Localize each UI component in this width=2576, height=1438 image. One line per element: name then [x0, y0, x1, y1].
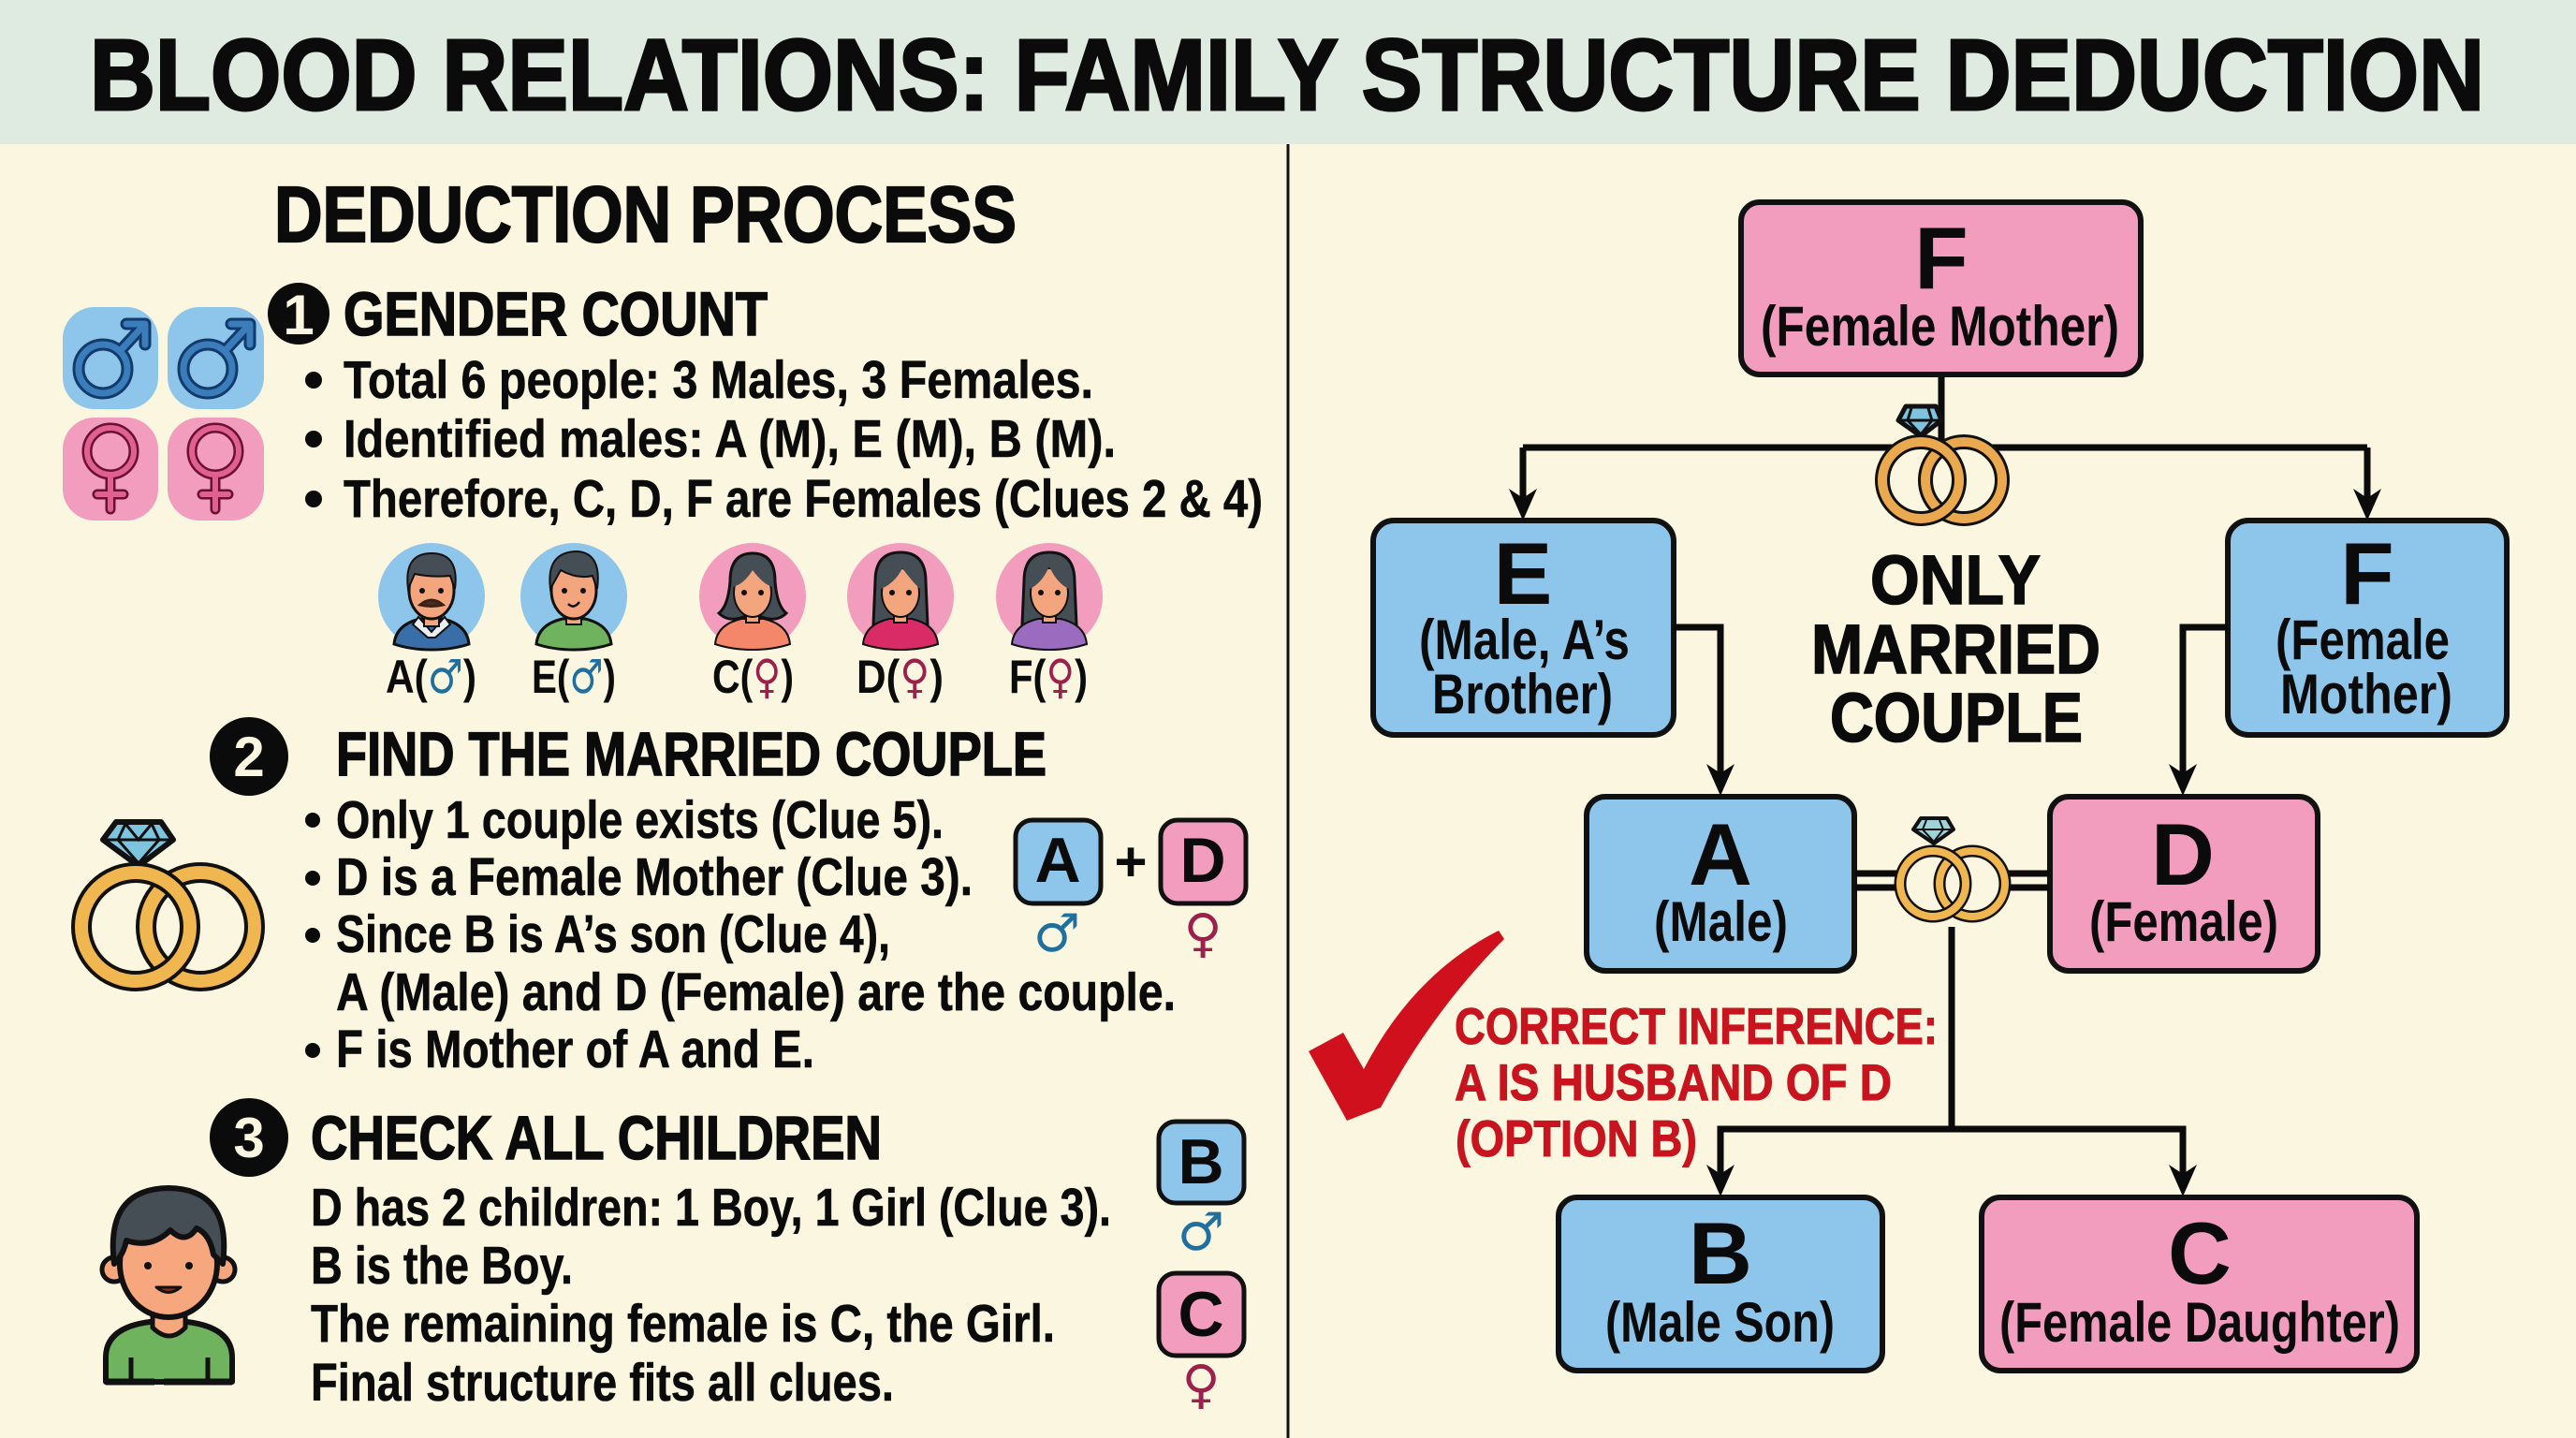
step 3 text: B is the Boy. — [311, 1236, 573, 1296]
node: E male brother: E — [1494, 524, 1552, 623]
node: E male brother: Brother) — [1432, 663, 1613, 726]
step 1: gender count — [63, 279, 1263, 704]
step 3 text: Final structure fits all clues. — [311, 1353, 894, 1413]
node: B male son — [1559, 1197, 1882, 1371]
avatar labels: A(♂) — [386, 650, 476, 704]
badge: C female — [1159, 1273, 1244, 1416]
avatar labels: E(♂) — [532, 650, 616, 704]
node: F female mother: (Female Mother) — [1761, 295, 2119, 358]
couple badge: A + D: ♂ — [1033, 903, 1080, 964]
step 2 bullet list: F is Mother of A and E. — [336, 1020, 814, 1079]
node: D female: (Female) — [2089, 890, 2278, 953]
step 2 bullet list: D is a Female Mother (Clue 3). — [336, 847, 973, 907]
node: F female mother — [1741, 202, 2141, 374]
callout: correct inference — [1455, 997, 1938, 1167]
node: C female daughter: C — [2168, 1204, 2232, 1302]
avatar labels: F(♀) — [1009, 650, 1088, 704]
connector: E to A — [1674, 627, 1734, 796]
step 3 heading: CHECK ALL CHILDREN — [311, 1103, 882, 1172]
label: only married couple: COUPLE — [1830, 679, 2083, 756]
couple badge: A + D — [1016, 820, 1246, 964]
panel: deduction process — [63, 170, 1263, 1416]
avatar: A male — [378, 543, 485, 650]
badge: B male — [1159, 1122, 1244, 1263]
node: F female mother (right): (Female — [2276, 609, 2450, 671]
step 2 heading: FIND THE MARRIED COUPLE — [336, 719, 1046, 788]
badge: B male: B — [1178, 1126, 1224, 1197]
step number 3 — [210, 1098, 288, 1177]
step number 2: 2 — [233, 726, 265, 788]
node: D female — [2050, 797, 2318, 971]
step 2 bullet list: Only 1 couple exists (Clue 5). — [336, 790, 944, 850]
label: only married couple: ONLY — [1870, 541, 2041, 619]
node: B male son: (Male Son) — [1605, 1291, 1835, 1354]
badge: C female: ♀ — [1181, 1355, 1221, 1416]
connector: F to D — [2169, 627, 2228, 796]
node: D female: D — [2151, 805, 2215, 903]
node: A male — [1587, 797, 1854, 971]
node: F female mother: F — [1914, 209, 1969, 307]
label: only married couple — [1811, 541, 2100, 756]
step 3: check all children — [102, 1098, 1244, 1416]
step number 1 — [268, 283, 329, 346]
node: C female daughter — [1982, 1197, 2417, 1371]
step 2: find the married couple — [81, 717, 1246, 1079]
node: F female mother (right): Mother) — [2280, 663, 2452, 726]
node: E male brother: (Male, A’s — [1419, 609, 1630, 671]
node: E male brother — [1373, 521, 1674, 735]
callout: correct inference: CORRECT INFERENCE: — [1455, 997, 1938, 1055]
couple badge: A + D: ♀ — [1183, 903, 1222, 964]
node: A male: (Male) — [1654, 890, 1788, 953]
badge: C female: C — [1178, 1279, 1224, 1350]
couple badge: A + D: + — [1114, 830, 1148, 893]
connector: couple to children — [1706, 927, 2197, 1196]
step 3 text: D has 2 children: 1 Boy, 1 Girl (Clue 3). — [311, 1178, 1111, 1238]
avatar labels: D(♀) — [856, 650, 944, 704]
callout: correct inference: A IS HUSBAND OF D — [1455, 1053, 1892, 1111]
connector: F to children E and F — [1509, 374, 2381, 521]
step 2 bullet list: Since B is A’s son (Clue 4), — [336, 904, 890, 964]
step 1 bullet list — [305, 350, 1263, 529]
step number 1: 1 — [283, 284, 315, 346]
node: F female mother (right) — [2228, 521, 2507, 735]
label: only married couple: MARRIED — [1811, 610, 2100, 688]
couple badge: A + D: A — [1034, 825, 1081, 896]
badge: B male: ♂ — [1178, 1202, 1224, 1263]
step 1 heading: GENDER COUNT — [344, 279, 768, 348]
icon: red check mark — [1309, 931, 1504, 1121]
node: A male: A — [1689, 805, 1752, 903]
avatar: C female — [699, 543, 806, 650]
icon: boy — [102, 1188, 235, 1382]
connector: marriage double line — [1855, 873, 2050, 888]
couple badge: A + D: D — [1179, 825, 1226, 896]
avatar labels — [386, 650, 1088, 704]
step 2 bullet list — [305, 790, 1176, 1079]
icon: middle wedding rings — [1895, 818, 2011, 922]
avatar labels: C(♀) — [712, 650, 794, 704]
step 1 bullet list: Therefore, C, D, F are Females (Clues 2 & 4) — [344, 469, 1263, 529]
node: C female daughter: (Female Daughter) — [1999, 1291, 2400, 1354]
icon: gender tiles — [63, 307, 264, 521]
step 2 bullet list: A (Male) and D (Female) are the couple. — [336, 962, 1176, 1022]
icon: top wedding rings — [1876, 406, 2009, 525]
callout: correct inference: (OPTION B) — [1456, 1109, 1697, 1167]
avatar: D female — [847, 543, 954, 650]
step number 2 — [210, 717, 288, 796]
step number 3: 3 — [233, 1107, 265, 1169]
avatar: E male — [520, 543, 627, 650]
node: F female mother (right): F — [2340, 524, 2394, 623]
heading: deduction process: DEDUCTION PROCESS — [274, 170, 1017, 258]
panel: family tree — [1309, 202, 2507, 1371]
node: B male son: B — [1689, 1204, 1752, 1302]
icon: wedding rings — [81, 822, 255, 981]
step 3 text — [311, 1178, 1111, 1413]
avatar: F female — [996, 543, 1103, 650]
step 1 bullet list: Identified males: A (M), E (M), B (M). — [344, 409, 1116, 469]
step 1 bullet list: Total 6 people: 3 Males, 3 Females. — [344, 350, 1093, 410]
step 3 text: The remaining female is C, the Girl. — [311, 1294, 1055, 1354]
